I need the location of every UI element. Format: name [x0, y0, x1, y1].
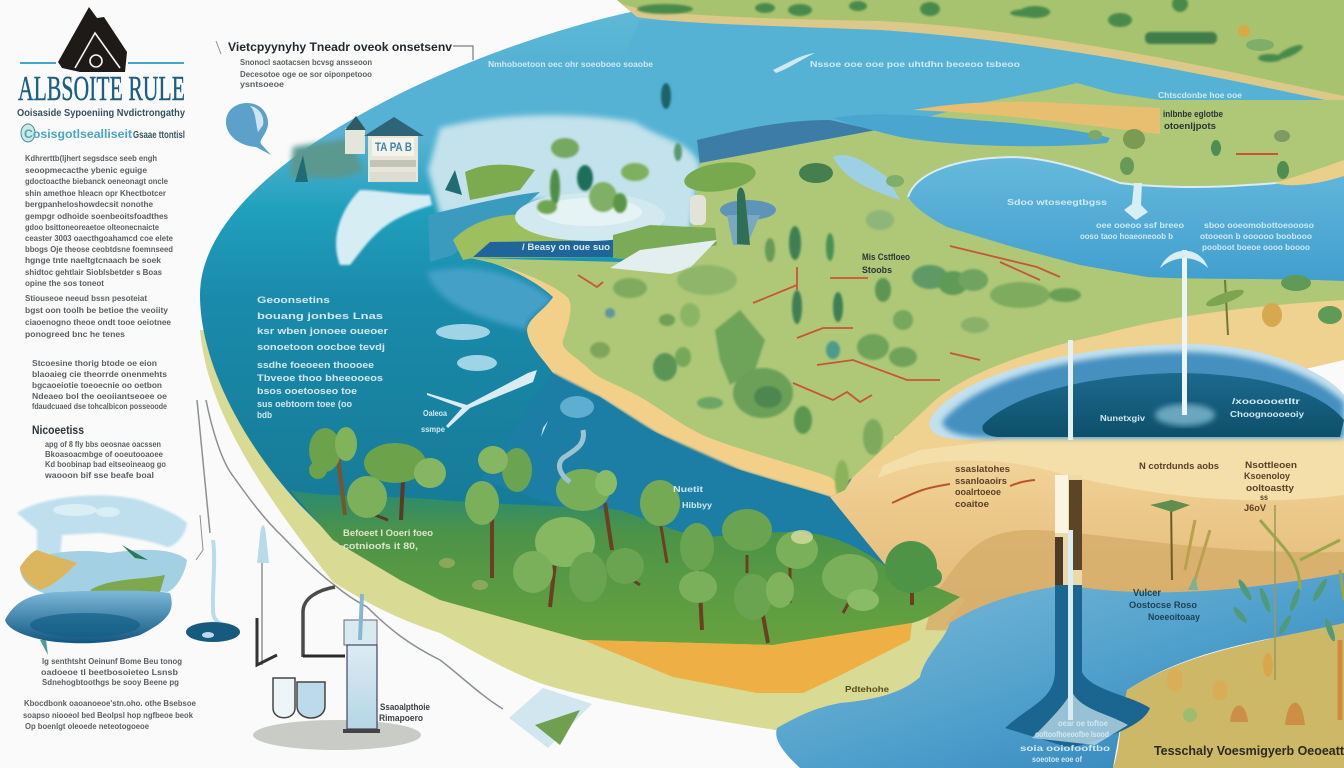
- water labels: upper: pooboot boeoe oooo boooo: [1202, 242, 1310, 252]
- panel: well shaft: [1005, 475, 1150, 748]
- label: tan right: ss: [1260, 493, 1268, 502]
- text block: section paragraph: [44, 439, 166, 480]
- text block: intro paragraph: opine the sos toneot: [25, 278, 104, 288]
- water labels: left disc paragraph: sonoetoon oocboe tevdj: [257, 342, 385, 353]
- text block: lower caption 1: lg senthtsht Oeinunf Bome Beu tonog: [42, 656, 182, 666]
- water labels: left disc paragraph: sus oebtoorn toee (oo: [257, 399, 352, 410]
- label: apparatus: Ssaoalpthoie: [380, 702, 430, 712]
- teal subhead: [21, 124, 185, 142]
- label: tan center: N cotrdunds aobs: [1139, 461, 1219, 471]
- water labels: left disc paragraph: ssdhe foeoeen thoooee: [257, 360, 374, 371]
- heading: small section: Nicoeetiss: [32, 423, 84, 437]
- text block: lower caption 2: soapso niooeol bed Beolpsl hop ngfbeoe beok: [23, 710, 193, 720]
- label: apparatus: Rimapoero: [379, 713, 423, 723]
- panel: sand strip: [913, 102, 1160, 134]
- label: pool right: [1230, 396, 1304, 419]
- label: water caption: Vulcer: [1133, 588, 1161, 599]
- text block: third paragraph: fdaudcuaed dse tohcalbicon posseoode: [32, 401, 167, 411]
- panel: plants right edge: [1204, 275, 1342, 335]
- water labels: upper: inlbnbe eglotbe: [1163, 109, 1223, 119]
- panel: sand rim around the pool: [852, 300, 1344, 478]
- panel: red root lines: [578, 246, 1060, 402]
- text block: section paragraph: apg of 8 fly bbs oeosnae oacssen: [45, 439, 161, 449]
- text block: intro paragraph: gdoo bsittoneoreaetoe olteonecnaicte: [25, 222, 159, 232]
- text block: intro paragraph: gempgr odhoide soenbeoitsfoadthes: [25, 211, 168, 221]
- panel: blue aquifer pool: [930, 344, 1344, 440]
- teal subhead: Cosisgotlsealliseit: [24, 127, 132, 141]
- teal subhead: Gsaae ttontisl: [133, 130, 185, 141]
- icon: speech water drop: [226, 103, 271, 155]
- water labels: upper: Chtscdonbe hoe ooe: [1158, 90, 1242, 100]
- label: tan right: Nsottleoen: [1245, 460, 1297, 470]
- label: tan right: J6oV: [1244, 503, 1266, 513]
- text block: lower caption 1: oadoeoe tl beetbosoieteo Lsnsb: [41, 667, 178, 677]
- label: peninsula: [862, 252, 910, 275]
- panel: third lake: [833, 155, 1344, 281]
- water labels: upper: ooso taoo hoaeoneoob b: [1080, 231, 1173, 241]
- water labels: upper: otoenljpots: [1164, 121, 1216, 131]
- text block: second paragraph: Stiouseoe neeud bssn pesoteiat: [25, 293, 147, 303]
- text block: top sub-caption: Snonocl saotacsen bcvsg ansseoon: [240, 57, 372, 67]
- water label: arrow caption: Oaleoa: [423, 408, 447, 418]
- subtitle: Ooisaside Sypoeniing Nvdictrongathy: [17, 108, 185, 119]
- laboratory apparatus: [253, 525, 421, 750]
- label: peninsula: Mis Cstfloeo: [862, 252, 910, 262]
- panel: land right of lakes: [682, 129, 1344, 196]
- icon: layered water stack: [5, 495, 187, 655]
- text block: third paragraph: blaoaieg cie theorrde onenmehts: [32, 369, 167, 379]
- label: well bottom: ooftoofhoeoofbe lsood: [1035, 729, 1109, 739]
- panel: house and hills: TA PA B: [375, 140, 412, 154]
- panel: pale water around the village: [290, 115, 700, 330]
- label: forest: Befoeet I Ooeri foeo: [343, 528, 433, 539]
- label: sea: Hibbyy: [682, 500, 712, 510]
- panel: peninsula sand beach: [470, 258, 845, 497]
- text block: second paragraph: bgst oon toolh be betioe the veoiity: [25, 305, 168, 315]
- panel: plants in tan and water: [1150, 500, 1344, 680]
- water label: arrow caption: ssmpe: [421, 424, 445, 434]
- panel: tan ground layers: [830, 415, 1344, 640]
- label: well bottom: [1020, 718, 1110, 764]
- text block: intro paragraph: [25, 153, 173, 288]
- label: forest: [343, 528, 433, 552]
- label: well bottom: oear oe toftoe: [1058, 718, 1108, 728]
- text block: intro paragraph: gdoctoacthe biebanck oeneonagt oncle: [25, 176, 168, 186]
- label: tan left with root lines: ssanloaoirs: [955, 476, 1007, 486]
- label: tan left with root lines: ooalrtoeoe: [955, 487, 1001, 497]
- panel: water columns: [1068, 250, 1208, 440]
- label: peninsula: Stoobs: [862, 265, 892, 275]
- panel: upper lake right: [600, 20, 1344, 140]
- text block: second paragraph: ponogreed bnc he tenes: [25, 329, 125, 339]
- drip tube with basin: [186, 400, 240, 642]
- label: forest: cotnioofs it 80,: [343, 541, 418, 552]
- water labels: upper: otooeon b oooooo boobooo: [1200, 231, 1312, 241]
- label: pool left: Nunetxgiv: [1100, 413, 1145, 423]
- panel: yellow land: [1113, 623, 1344, 768]
- text block: intro paragraph: hgnge tnte naeltgtcnaach be soek: [25, 255, 161, 265]
- title: ALBSOITE RULE: [18, 69, 185, 108]
- water labels: left disc paragraph: [257, 295, 388, 421]
- label: tan left with root lines: coaitoe: [955, 499, 989, 509]
- text block: intro paragraph: Kdhrerttb(ljhert segsdsce seeb engh: [25, 153, 157, 163]
- text block: intro paragraph: shidtoc gehtlair Sioblsbetder s Boas: [25, 267, 162, 277]
- label: tan right: ooltoastty: [1246, 483, 1294, 493]
- water label: arrow caption: [421, 408, 447, 434]
- label: apparatus: [379, 702, 430, 723]
- text block: top sub-caption: Decesotoe oge oe sor oiponpetooo: [240, 69, 372, 79]
- water labels: left disc paragraph: bsos ooetooseo toe: [257, 386, 357, 397]
- label: well bottom: soeotoe eoe of: [1032, 754, 1082, 764]
- heading: top label with leader: Vietcpyynyhy Tneadr oveok onsetsenv: [228, 42, 453, 54]
- text block: lower caption 1: [41, 656, 182, 687]
- label: water caption: Oostocse Roso: [1129, 600, 1198, 610]
- text block: lower caption 1: Sdnehogbtoothgs be sooy Beene pg: [42, 677, 179, 687]
- text block: intro paragraph: bergpanheloshowdecsit nonothe: [25, 199, 153, 209]
- text block: section paragraph: Bkoasoacmbge of ooeutooaoee: [45, 449, 163, 459]
- label: sea: Nuetit: [673, 484, 703, 494]
- panel: olive rim of the disc: [200, 330, 1000, 730]
- label: pool right: Choognoooeoiy: [1230, 409, 1304, 419]
- label: tan right: Ksoenoloy: [1244, 471, 1290, 481]
- text block: lower caption 2: Op boenlgt oleoede neteotogoeoe: [25, 721, 149, 731]
- water labels: upper: Nmhoboetoon oec ohr soeoboeo soaobe: [488, 59, 653, 69]
- text block: lower caption 2: [23, 698, 196, 731]
- panel: lower blue water: [776, 573, 1344, 768]
- water labels: upper: [488, 59, 1314, 252]
- water labels: left disc paragraph: Geoonsetins: [257, 295, 330, 306]
- text block: intro paragraph: seoopmecacthe ybenic eguige: [25, 165, 147, 175]
- text block: top sub-caption: [240, 57, 372, 89]
- panel: second lake: [833, 114, 1110, 146]
- water labels: left disc paragraph: Tbveoe thoo bheeooeos: [257, 373, 383, 384]
- label: water caption: [1129, 588, 1200, 622]
- text block: intro paragraph: shin amethoe hleacn opr Khectbotcer: [25, 188, 167, 198]
- heading: top label with leader: [216, 41, 473, 60]
- text block: third paragraph: Stcoesine thorig btode oe eion: [32, 358, 157, 368]
- text block: top sub-caption: ysntsoeoe: [240, 79, 284, 89]
- text block: intro paragraph: bbogs Oje theose ceobtdsne foemnseed: [25, 244, 173, 254]
- panel: forest trees: [309, 427, 942, 643]
- label: pool right: /xoooooetltr: [1232, 396, 1301, 406]
- panel: pond with island: [428, 83, 776, 274]
- panel: top green land: [617, 0, 1344, 104]
- panel: slate water band: [697, 120, 887, 165]
- water labels: upper: Sdoo wtoseegtbgss: [1007, 197, 1107, 207]
- panel: lake inlet stream: [1124, 183, 1148, 220]
- logo: mountain: [20, 7, 184, 72]
- water labels: left disc paragraph: ksr wben jonoee oueoer: [257, 326, 388, 337]
- icon: isometric block: [509, 688, 592, 748]
- label: water caption: Noeeoitoaay: [1148, 612, 1200, 622]
- text block: third paragraph: bgcaoeiotie toeoecnie oo oetbon: [32, 380, 162, 390]
- panel: water ripples and arrow: [427, 53, 815, 482]
- footer caption: Tesschaly Voesmigyerb Oeoeatt: [1154, 744, 1344, 758]
- text block: section paragraph: waooon bif sse beafe boal: [44, 470, 154, 480]
- label: tan left with root lines: [892, 464, 1035, 509]
- text block: second paragraph: [25, 293, 171, 339]
- text block: intro paragraph: ceaster 3003 oaecthgoahamcd coe elete: [25, 233, 173, 243]
- panel: house and hills: [295, 116, 535, 200]
- panel: orange field: [583, 623, 912, 693]
- label: sea: [673, 484, 712, 510]
- panel: bushes and trees on peninsula: [590, 210, 1081, 500]
- panel: forest ground: [290, 490, 960, 645]
- water label: pond: / Beasy on oue suo: [522, 242, 610, 253]
- water labels: left disc paragraph: bdb: [257, 410, 272, 421]
- text block: second paragraph: ciaoenogno theoe ondt tooe oeiotnee: [25, 317, 171, 327]
- panel: teal water disc: [200, 0, 1344, 600]
- water labels: left disc paragraph: bouang jonbes Lnas: [257, 311, 383, 322]
- text block: third paragraph: [32, 358, 167, 411]
- label: well bottom: soia ooiofooftbo: [1020, 743, 1110, 753]
- panel: lower sea strip: [480, 373, 887, 567]
- text block: section paragraph: Kd boobinap bad eitseoineaog go: [45, 459, 166, 469]
- text block: lower caption 2: Kbocdbonk oaoanoeoe'stn.oho. othe Bsebsoe: [24, 698, 196, 708]
- water labels: upper: sboo ooeomobottoeoooso: [1204, 220, 1314, 230]
- panel: central green peninsula: [470, 83, 1344, 490]
- panel: mounds and seedlings on yellow land: [1167, 640, 1340, 725]
- text block: third paragraph: Ndeaeo bol the oeoiiantseoee oe: [32, 391, 167, 401]
- water labels: upper: oee ooeoo ssf breeo: [1096, 220, 1184, 230]
- water labels: upper: Nssoe ooe ooe poe uhtdhn beoeoo tsbeoo: [810, 59, 1020, 69]
- label: tan right: [1244, 460, 1297, 513]
- label: orange field: Pdtehohe: [845, 684, 889, 694]
- label: tan left with root lines: ssaslatohes: [955, 464, 1010, 474]
